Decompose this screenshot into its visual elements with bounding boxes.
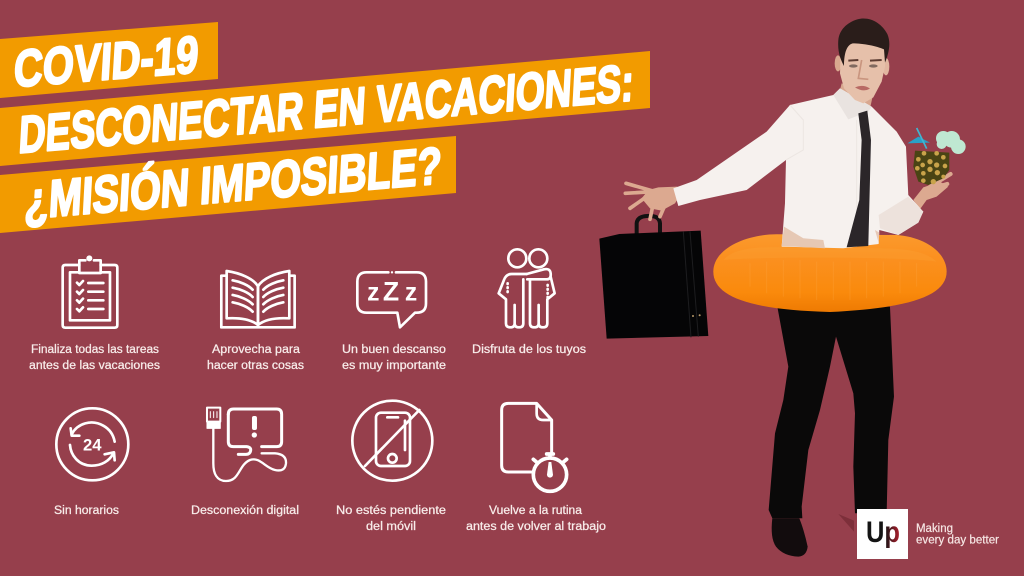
title band: Misión imposible [0, 136, 456, 233]
icon: sleep speech bubble: z [367, 279, 379, 306]
briefcase [599, 216, 708, 339]
icon: sleep speech bubble [357, 271, 426, 327]
trousers and shoes [769, 307, 894, 557]
swim ring [713, 234, 947, 312]
tip: back to routine [466, 403, 606, 533]
man in swim ring [599, 19, 966, 557]
tagline [916, 523, 999, 546]
right hand [913, 174, 951, 209]
tagline: Making [916, 523, 953, 535]
label [29, 344, 160, 372]
tip: digital disconnection [191, 408, 299, 517]
logo wordmark: Up [866, 516, 900, 549]
white logo tile [857, 509, 908, 559]
shirt and arms [625, 83, 951, 248]
label: No estés pendiente [336, 505, 446, 517]
label: Finaliza todas las tareas [31, 344, 159, 356]
icon: monitor with unplugged cable [207, 408, 286, 481]
label: hacer otras cosas [207, 360, 304, 372]
title [0, 22, 650, 233]
icon: document and stopwatch [502, 403, 567, 491]
shirt [673, 88, 923, 248]
label: Aprovecha para [212, 344, 301, 356]
title band: Misión imposible: ¿MISIÓN IMPOSIBLE? [23, 137, 443, 231]
pineapple cocktail [907, 128, 966, 185]
left hand [625, 183, 679, 219]
label: antes de las vacaciones [29, 360, 160, 372]
neck [838, 83, 873, 115]
label: es muy importante [342, 360, 446, 372]
label [336, 505, 446, 533]
icon: clipboard [63, 255, 117, 328]
icon: crossed out phone [352, 401, 432, 481]
tagline: every day better [916, 534, 999, 546]
tip: no schedules [54, 408, 128, 517]
icon: 24 hour clock: 24 [83, 436, 102, 455]
label: Vuelve a la rutina [489, 505, 583, 517]
icon: two people embracing [499, 249, 555, 327]
icon: open book [221, 271, 295, 327]
tip: no mobile [336, 401, 446, 533]
label: Un buen descanso [342, 344, 446, 356]
tip: finish tasks [29, 255, 160, 372]
label: Sin horarios [54, 505, 119, 517]
head [835, 19, 889, 103]
icon: sleep speech bubble: Z [383, 277, 399, 307]
tip: rest [342, 271, 446, 372]
title band: COVID-19: COVID-19 [12, 26, 200, 99]
label [207, 344, 304, 372]
title band: Desconectar en vacaciones: DESCONECTAR EN VACACIONES: [17, 54, 635, 165]
label [466, 505, 606, 533]
icon: sleep speech bubble: z [405, 279, 417, 306]
label [342, 344, 446, 372]
tip: other activities [207, 271, 304, 372]
label: antes de volver al trabajo [466, 521, 606, 533]
tie [847, 111, 871, 247]
logo: Up [857, 509, 908, 559]
tip: family [472, 249, 586, 356]
label: Desconexión digital [191, 505, 299, 517]
title band: Desconectar en vacaciones [0, 51, 650, 166]
label: Disfruta de los tuyos [472, 344, 586, 356]
label: del móvil [366, 521, 416, 533]
